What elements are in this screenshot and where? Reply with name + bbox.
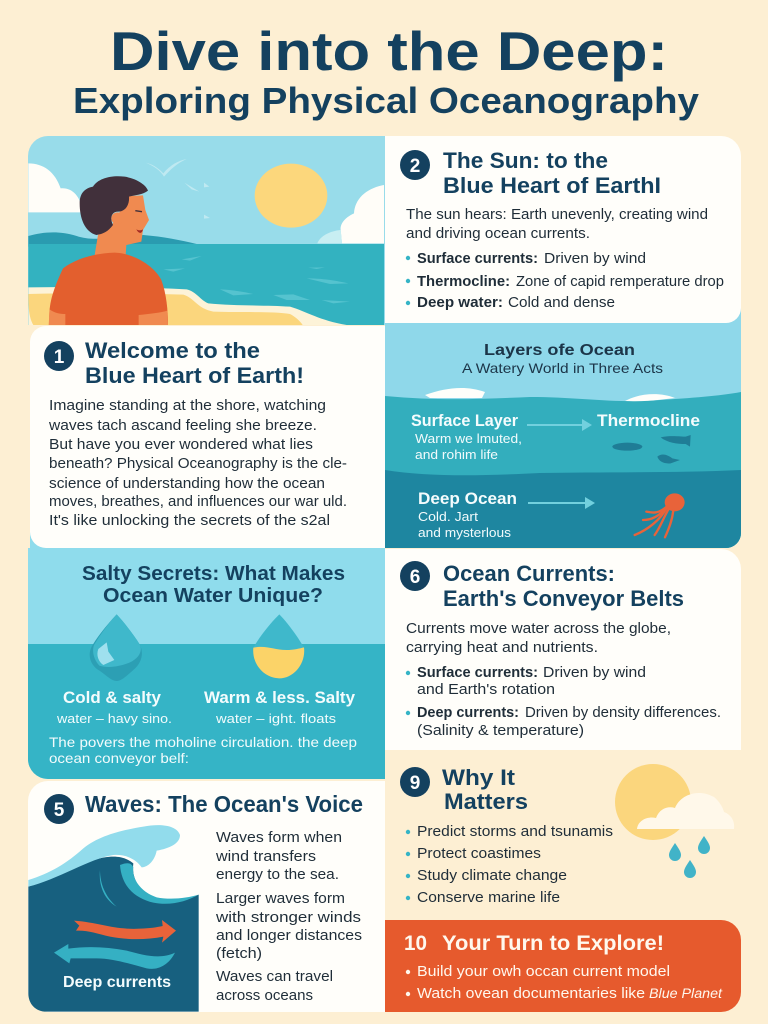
label: deep currents: Deep currents: [63, 974, 171, 991]
badge 6: 6: [410, 567, 420, 588]
text block: circulation: [49, 734, 357, 766]
text block: waves: [215, 830, 362, 1004]
icon: warm less salty drop: [253, 614, 304, 678]
text block: waves: with stronger winds: [215, 910, 361, 926]
illustration: wave with currents: [28, 825, 199, 1012]
text block: sun intro: and driving ocean currents.: [406, 226, 590, 242]
badge 2: [400, 150, 430, 180]
heading: layers: Layers ofe Ocean: [484, 342, 635, 359]
text block: waves: Waves form when: [216, 830, 342, 846]
list: activities: Blue Planet: [649, 986, 723, 1001]
heading: why it matters: Why It: [442, 765, 516, 790]
text block: welcome: moves, breathes, and influences our war uld.: [49, 494, 347, 510]
heading: the sun: The Sun: to the: [443, 148, 608, 173]
list: current types: (Salinity & temperature): [417, 723, 584, 739]
label: warm and less salty: Warm & less. Salty: [204, 688, 356, 707]
badge 9: 9: [410, 773, 420, 794]
panel: ocean currents: [385, 549, 741, 750]
list: ocean layers: Thermocline:: [417, 274, 510, 290]
list: current types: Surface currents:: [417, 665, 538, 681]
heading: salty secrets: Salty Secrets: What Makes: [82, 563, 345, 585]
illustration: person looking at the sea: [49, 176, 168, 325]
title: Exploring Physical Oceanography: [73, 80, 699, 121]
heading: your turn: 10: [404, 932, 427, 955]
list: current types: Driven by density differences.: [525, 705, 721, 721]
badge 6: [400, 561, 430, 591]
badge 2: 2: [410, 156, 420, 177]
label: warm and less salty: water – ight. floats: [215, 712, 336, 726]
list: reasons: Protect coastimes: [417, 846, 541, 862]
label: surface layer: and rohim life: [415, 448, 498, 462]
label: deep ocean: Deep Ocean: [418, 489, 517, 508]
heading: waves: Waves: The Ocean's Voice: [85, 791, 363, 817]
panel: the sun: [385, 136, 741, 323]
text block: welcome: It's like unlocking the secrets of the s2al: [49, 513, 330, 529]
list: ocean layers: Zone of capid remperature drop: [516, 274, 724, 290]
panel: waves: [28, 781, 385, 1012]
list: current types: Deep currents:: [417, 705, 519, 721]
badge 5: [44, 794, 74, 824]
panel: salty secrets: [28, 530, 385, 779]
text block: sun intro: [406, 207, 708, 242]
heading: why it matters: Matters: [444, 789, 528, 814]
heading: layers: A Watery World in Three Acts: [462, 360, 663, 376]
heading: why it matters: [442, 765, 528, 814]
list: current types: and Earth's rotation: [417, 682, 555, 698]
panel: layers of the ocean: [385, 300, 741, 548]
title: [73, 20, 699, 121]
label: deep ocean: and mysterlous: [418, 526, 511, 540]
badge 5: 5: [54, 800, 65, 821]
text block: welcome: beneath? Physical Oceanography is the cle-: [49, 456, 347, 472]
panel: beach scene illustration: [28, 136, 385, 325]
text block: currents intro: [406, 621, 671, 656]
title: Dive into the Deep:: [110, 20, 668, 82]
heading: the sun: [443, 148, 661, 198]
label: warm and less salty: [204, 688, 356, 726]
label: cold and salty: water – havy sino.: [56, 712, 172, 726]
panel: welcome: [30, 326, 385, 548]
badge 1: [44, 341, 74, 371]
label: thermocline: Thermocline: [597, 411, 700, 430]
label: surface layer: Warm we lmuted,: [415, 432, 522, 446]
list: ocean layers: Driven by wind: [544, 251, 646, 267]
heading: welcome: Welcome to the: [85, 338, 260, 363]
heading: welcome: [85, 338, 304, 388]
list: reasons: Predict storms and tsunamis: [417, 824, 613, 840]
label: deep ocean: [418, 489, 517, 540]
label: deep ocean: Cold. Jart: [418, 510, 479, 524]
arrow: cold deep current: [54, 944, 175, 969]
text block: welcome: Imagine standing at the shore, watching: [49, 398, 326, 414]
text block: waves: wind transfers: [215, 849, 316, 865]
list: activities: [406, 964, 723, 1002]
arrow: warm surface current: [74, 920, 176, 943]
arrow: deep ocean: [528, 497, 595, 509]
list: activities: Build your owh occan current model: [417, 964, 670, 980]
text block: circulation: ocean conveyor belf:: [49, 750, 189, 766]
list: reasons: Conserve marine life: [417, 890, 560, 906]
panel: why it matters: [400, 764, 734, 906]
heading: ocean currents: Ocean Currents:: [443, 561, 615, 586]
text block: waves: Waves can travel: [216, 969, 333, 985]
panel: your turn to explore: [385, 920, 741, 1012]
label: cold and salty: [56, 688, 172, 726]
heading: ocean currents: Earth's Conveyor Belts: [443, 586, 684, 611]
list: reasons: Study climate change: [417, 868, 567, 884]
text block: sun intro: The sun hears: Earth unevenly, creating wind: [406, 207, 708, 223]
heading: welcome: Blue Heart of Earth!: [85, 363, 304, 388]
heading: the sun: Blue Heart of EarthI: [443, 173, 661, 198]
icon: sun and rain cloud: [615, 764, 734, 878]
text block: waves: Larger waves form: [216, 891, 345, 907]
list: ocean layers: [406, 251, 724, 311]
text block: waves: energy to the sea.: [216, 867, 339, 883]
heading: ocean currents: [443, 561, 684, 611]
text block: welcome: science of understanding how the ocean: [49, 476, 325, 492]
list: reasons: [406, 824, 613, 906]
label: surface layer: [411, 411, 522, 462]
heading: layers: [462, 342, 663, 376]
text block: waves: and longer distances: [216, 928, 362, 944]
list: current types: Driven by wind: [543, 665, 646, 681]
text block: currents intro: Currents move water across the globe,: [406, 621, 671, 637]
heading: your turn: Your Turn to Explore!: [442, 932, 664, 955]
list: ocean layers: Surface currents:: [417, 251, 538, 267]
text block: waves: (fetch): [216, 946, 262, 962]
arrow: surface to thermocline: [527, 419, 592, 431]
text block: welcome: waves tach ascand feeling she breeze.: [48, 418, 317, 434]
heading: salty secrets: Ocean Water Unique?: [103, 585, 323, 607]
text block: circulation: The povers the moholine circulation. the deep: [49, 734, 357, 750]
list: ocean layers: Deep water:: [417, 295, 503, 311]
heading: salty secrets: [82, 563, 345, 607]
label: surface layer: Surface Layer: [411, 411, 518, 430]
list: current types: [406, 665, 721, 739]
text block: welcome: [48, 398, 347, 529]
badge 9: [400, 767, 430, 797]
text block: welcome: But have you ever wondered what lies: [49, 437, 313, 453]
icon: cold salty drop: [90, 614, 142, 681]
icon: jellyfish: [635, 493, 685, 537]
text block: currents intro: carrying heat and nutrients.: [406, 640, 598, 656]
badge 1: 1: [54, 347, 65, 368]
label: cold and salty: Cold & salty: [63, 688, 162, 707]
list: ocean layers: Cold and dense: [508, 295, 615, 311]
icon: fish: [612, 435, 691, 463]
list: activities: Watch ovean documentaries like: [417, 986, 645, 1002]
text block: waves: across oceans: [216, 988, 313, 1004]
